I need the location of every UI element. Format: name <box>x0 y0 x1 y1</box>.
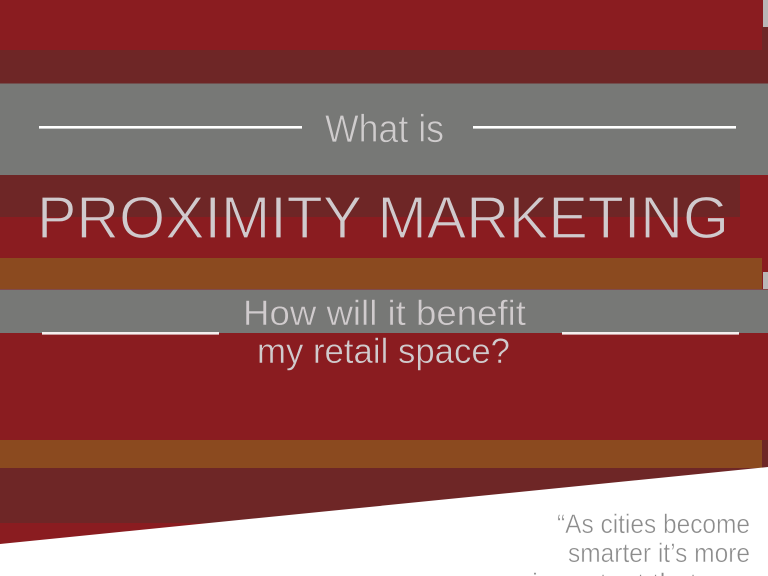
subtitle: how will it benefit my retail space: my retail space? <box>257 332 510 371</box>
quote text: “As cities become <box>557 509 750 539</box>
subtitle rule right <box>562 332 739 335</box>
quote text <box>532 509 750 576</box>
subtitle rule left <box>42 332 219 335</box>
dark red band top <box>0 50 768 84</box>
right grey tab middle <box>763 272 768 289</box>
right dark sliver lower <box>762 440 768 468</box>
title: proximity marketing: PROXIMITY MARKETING <box>37 185 729 251</box>
subtitle: how will it benefit my retail space: How will it benefit <box>243 294 526 333</box>
orange band lower <box>0 440 762 468</box>
top right grey tab <box>763 0 768 27</box>
white diagonal panel <box>0 467 768 576</box>
top right dark sliver <box>762 27 768 51</box>
dark red band lower <box>0 468 768 523</box>
orange band upper <box>0 258 762 289</box>
heading rule right <box>473 126 736 129</box>
grey band: subtitle <box>0 290 768 333</box>
heading rule left <box>39 126 302 129</box>
dark red band behind title <box>0 175 740 217</box>
grey band: what is <box>0 84 768 175</box>
quote text: smarter it’s more <box>568 538 750 568</box>
heading: what is: What is <box>325 108 444 151</box>
subtitle: how will it benefit my retail space <box>243 294 526 371</box>
